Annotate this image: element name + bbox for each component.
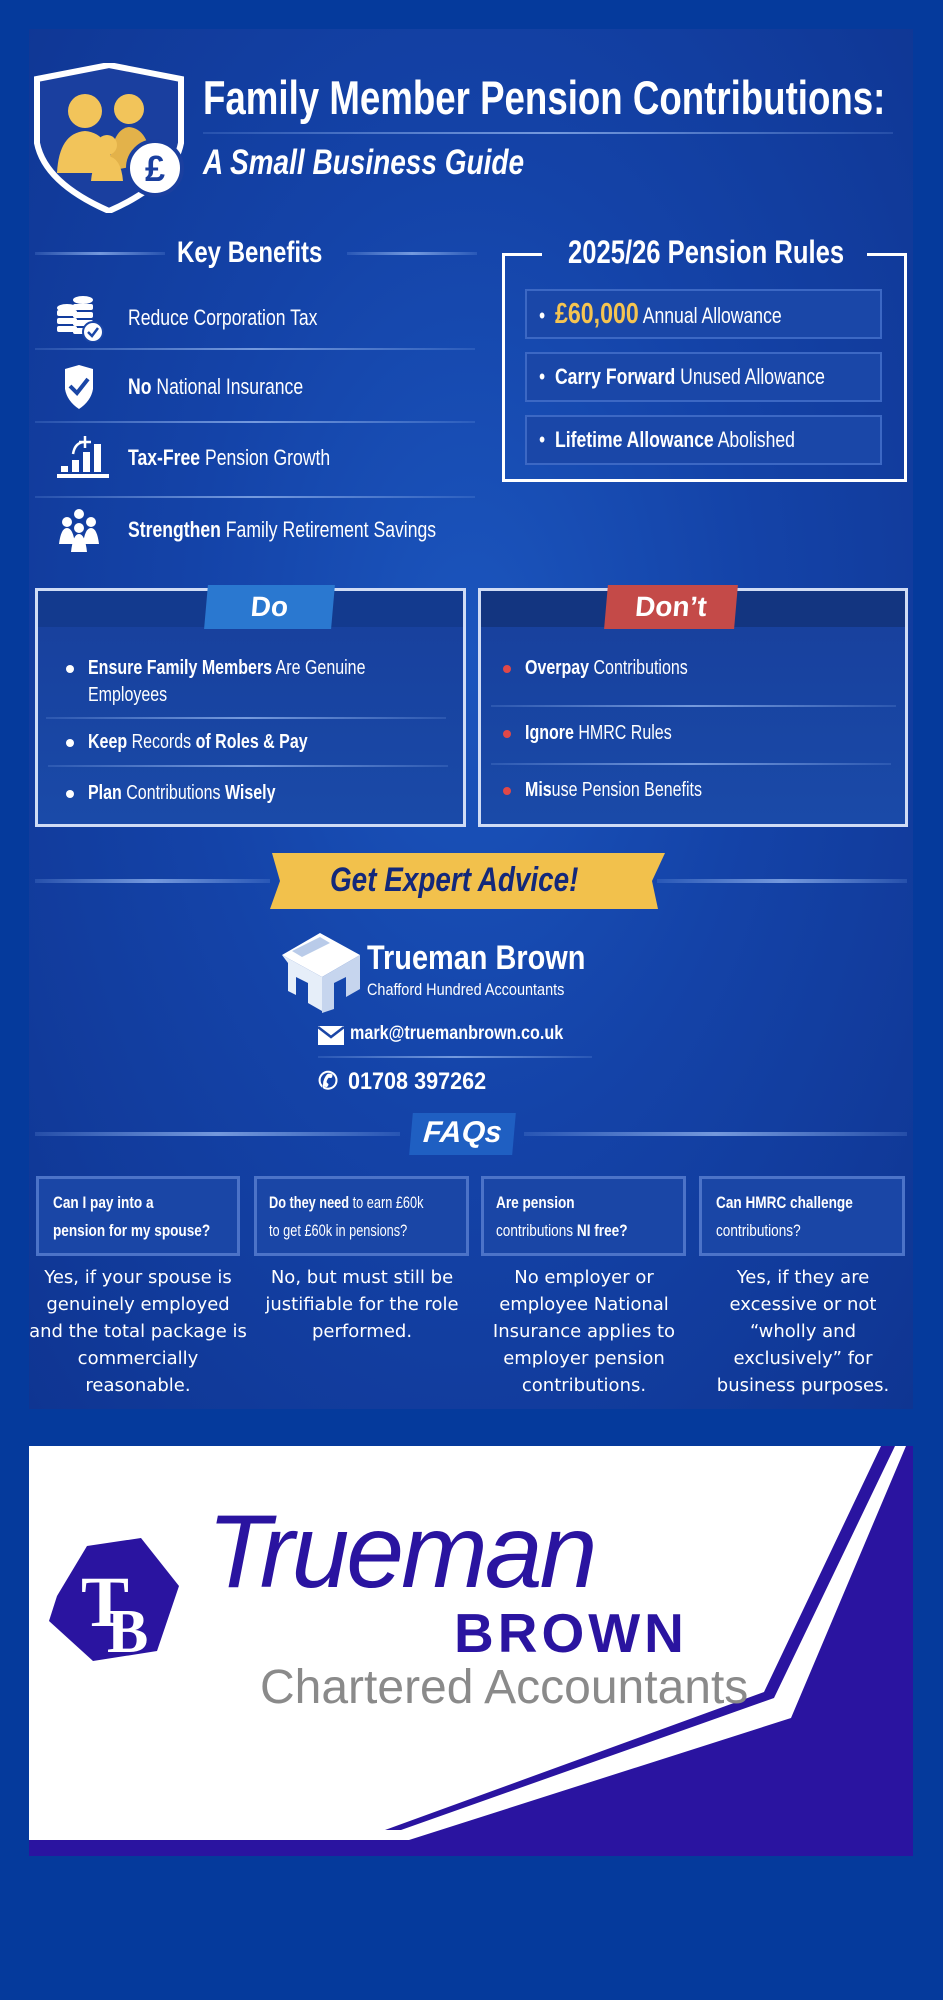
benefit: strengthen savings: Strengthen Family Retirement Savings: [128, 517, 436, 542]
rule: annual allowance: [525, 289, 882, 339]
benefit: reduce corporation tax: Reduce Corporation Tax: [128, 305, 317, 330]
tab: do: [204, 585, 335, 629]
banner: get expert advice: [270, 853, 665, 909]
footer logo: Trueman Brown Chartered Accountants: BROWN: [454, 1602, 688, 1664]
faq 3: contributions NI free?: [496, 1221, 628, 1240]
logo: trueman brown: [282, 933, 585, 1013]
don't item 1: Overpay Contributions: [525, 657, 688, 679]
panel: key benefits list: [35, 296, 475, 552]
do item 3: Plan Contributions Wisely: [88, 782, 276, 804]
text: No, but must still be justifiable for the role performed.: [265, 1267, 459, 1342]
panel: do: [35, 588, 466, 827]
contact: phone: 01708 397262: [348, 1068, 486, 1095]
background panel: [29, 29, 913, 1409]
benefit: reduce corporation tax: [57, 296, 318, 342]
faq 3: [481, 1176, 686, 1256]
panel: don't: [478, 588, 908, 827]
benefit: tax-free growth: [57, 436, 330, 478]
tab: FAQs: [409, 1113, 516, 1155]
do item 2: Keep Records of Roles & Pay: [88, 731, 308, 753]
rule: carry forward: [525, 352, 882, 402]
faq 4: [699, 1176, 905, 1256]
panel: 2025/26 pension rules: [502, 253, 907, 482]
faq 4: contributions?: [716, 1221, 801, 1240]
rule: lifetime allowance: [525, 415, 882, 465]
subtitle: A Small Business Guide: [203, 143, 524, 182]
faq 1: pension for my spouse?: [53, 1221, 210, 1240]
contact: phone: ✆: [318, 1068, 338, 1095]
faq 1: [36, 1176, 240, 1256]
icon: shield with family: £: [145, 148, 165, 189]
footer logo: Trueman Brown Chartered Accountants: [29, 1446, 913, 1856]
text: Yes, if they are excessive or not “wholly and exclusively” for business purposes.: [717, 1267, 889, 1396]
icon: shield with family: [34, 63, 184, 213]
do item 1: Ensure Family Members Are Genuine: [88, 657, 365, 679]
faq 2: Do they need to earn £60k: [269, 1193, 424, 1212]
rule: lifetime allowance: • Lifetime Allowance Abolished: [539, 427, 795, 452]
footer logo: Trueman Brown Chartered Accountants: Trueman: [207, 1494, 594, 1610]
logo: trueman brown: Chafford Hundred Accountants: [367, 980, 564, 999]
faq 1: Can I pay into a: [53, 1193, 154, 1212]
contact: email: mark@truemanbrown.co.uk: [350, 1023, 563, 1044]
faq 4: Can HMRC challenge: [716, 1193, 853, 1212]
do item 1: Employees: [88, 684, 167, 706]
footer logo: Trueman Brown Chartered Accountants: B: [107, 1598, 148, 1666]
heading: key benefits: [35, 236, 477, 269]
tab: don't: Don’t: [634, 591, 708, 622]
faq 2: [254, 1176, 469, 1256]
benefit: strengthen savings: [59, 509, 436, 552]
tab: FAQs: FAQs: [422, 1116, 503, 1149]
heading: pension rules: 2025/26 Pension Rules: [568, 234, 844, 270]
do item 1: [66, 657, 365, 706]
faq 2: to get £60k in pensions?: [269, 1221, 407, 1240]
benefit: tax-free growth: Tax-Free Pension Growth: [128, 445, 330, 470]
text: Yes, if your spouse is genuinely employed and the total package is commercially reasonable.: [29, 1267, 247, 1396]
rule: carry forward: • Carry Forward Unused Allowance: [539, 364, 825, 389]
heading: key benefits: Key Benefits: [177, 236, 322, 269]
don't item 2: Ignore HMRC Rules: [525, 722, 672, 744]
rule: annual allowance: • £60,000 Annual Allowance: [539, 298, 782, 330]
text: No employer or employee National Insurance applies to employer pension contributions.: [493, 1267, 675, 1396]
benefit: no NI: [65, 365, 303, 409]
banner: get expert advice: Get Expert Advice!: [330, 861, 578, 899]
faq 3: Are pension: [496, 1193, 575, 1212]
title: Family Member Pension Contributions:: [203, 71, 885, 124]
footer logo: Trueman Brown Chartered Accountants: T: [81, 1562, 129, 1642]
don't item 3: Misuse Pension Benefits: [525, 779, 702, 801]
tab: don't: [604, 585, 738, 629]
footer logo: Trueman Brown Chartered Accountants: Chartered Accountants: [260, 1661, 748, 1714]
benefit: no NI: No National Insurance: [128, 374, 303, 399]
logo: trueman brown: Trueman Brown: [367, 939, 585, 977]
tab: do: Do: [250, 591, 290, 622]
